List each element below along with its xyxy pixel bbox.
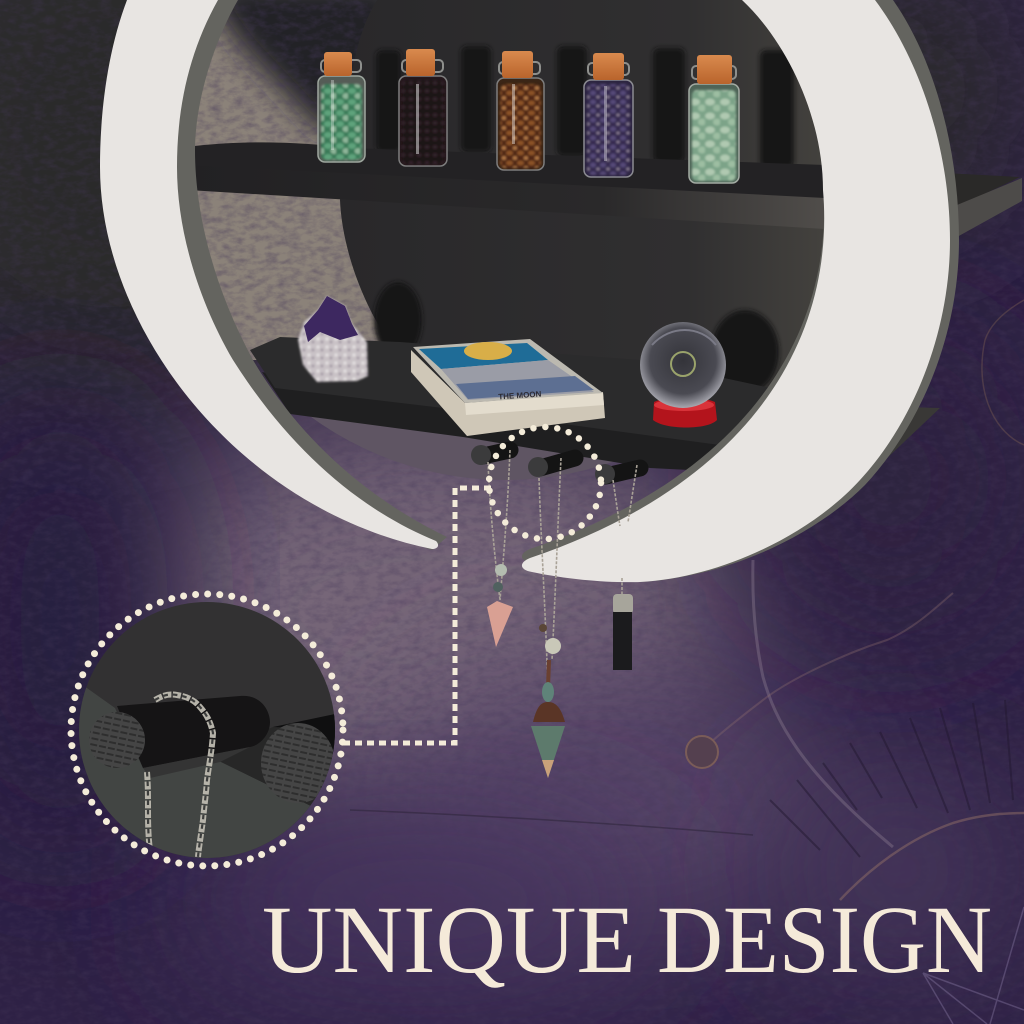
crescent right horn (522, 0, 950, 582)
jar: garnet (399, 49, 447, 166)
right shelf extensions (850, 173, 1022, 477)
crystal jars (318, 49, 739, 183)
title (262, 886, 992, 993)
pendant: fluorite with copper wrap (531, 624, 565, 778)
inset: silver chain (147, 695, 213, 857)
shelf interior: wall and back panel (180, 0, 835, 520)
title: UNIQUE (262, 886, 636, 993)
amethyst crystal cluster (298, 296, 368, 382)
necklace chains (488, 450, 637, 690)
jar: amethyst (584, 53, 633, 177)
inset dotted ring (71, 594, 343, 866)
inset: shelf underside (79, 688, 310, 858)
upper shelf (188, 142, 825, 229)
jar: green aventurine (318, 52, 365, 162)
crescent moon frame (100, 0, 959, 582)
hanging pegs (471, 445, 640, 484)
magnified detail inset (70, 590, 350, 870)
crescent left horn (100, 0, 438, 549)
faint astrological line art (350, 300, 1024, 1024)
crescent side edges (160, 0, 959, 582)
pendant: black tourmaline tube (613, 594, 633, 670)
lower shelf (250, 337, 780, 472)
inset: peg cylinder (117, 696, 270, 768)
inset: peg end cap (89, 712, 145, 768)
small dotted highlight circle on pegs (489, 427, 601, 539)
title: DESIGN (657, 886, 992, 993)
jar: light green quartz (689, 55, 739, 183)
tarot card deck (411, 339, 605, 436)
tarot card art: the moon (419, 342, 594, 401)
jar: tiger eye (497, 51, 544, 170)
pendant: rose quartz (487, 564, 513, 647)
inset: second peg end (261, 723, 335, 803)
small ringed knob (686, 736, 718, 768)
tarot card art: the moon: THE MOON (498, 389, 542, 401)
jar shadows (374, 46, 794, 394)
crystal ball on red stand (640, 322, 726, 428)
dashed connector line (343, 488, 491, 743)
